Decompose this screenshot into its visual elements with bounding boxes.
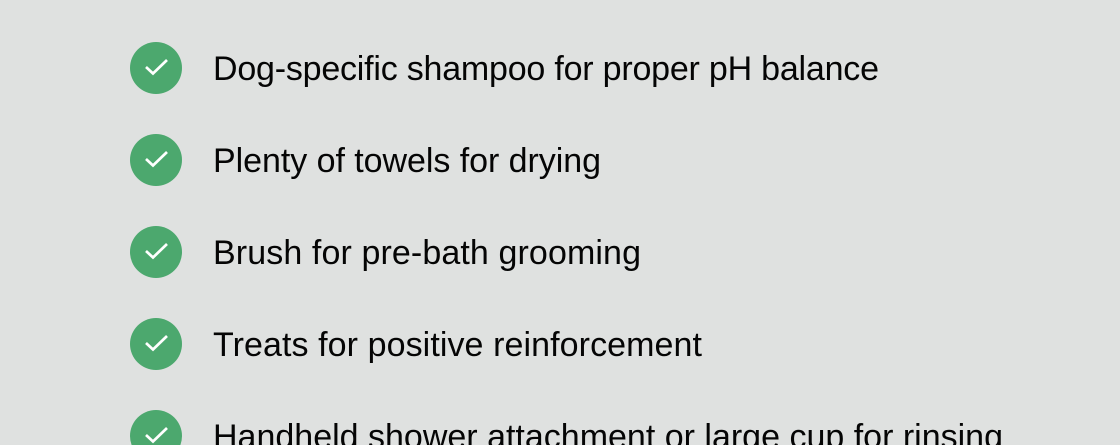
checklist item: towels [130, 134, 601, 186]
checklist item: brush [130, 226, 641, 278]
checklist item: shampoo [130, 42, 879, 94]
icon: green check circle [130, 318, 182, 370]
item text: treats: Treats for positive reinforcement [213, 326, 703, 364]
icon: green check circle [130, 226, 182, 278]
checklist item: shower attachment [130, 410, 1003, 445]
item text: shampoo: Dog-specific shampoo for proper pH balance [213, 50, 879, 88]
icon: green check circle [130, 42, 182, 94]
item text: brush: Brush for pre-bath grooming [213, 234, 641, 272]
checklist item: treats [130, 318, 703, 370]
icon: green check circle [130, 410, 182, 445]
icon: green check circle [130, 134, 182, 186]
item text: towels: Plenty of towels for drying [213, 142, 601, 180]
